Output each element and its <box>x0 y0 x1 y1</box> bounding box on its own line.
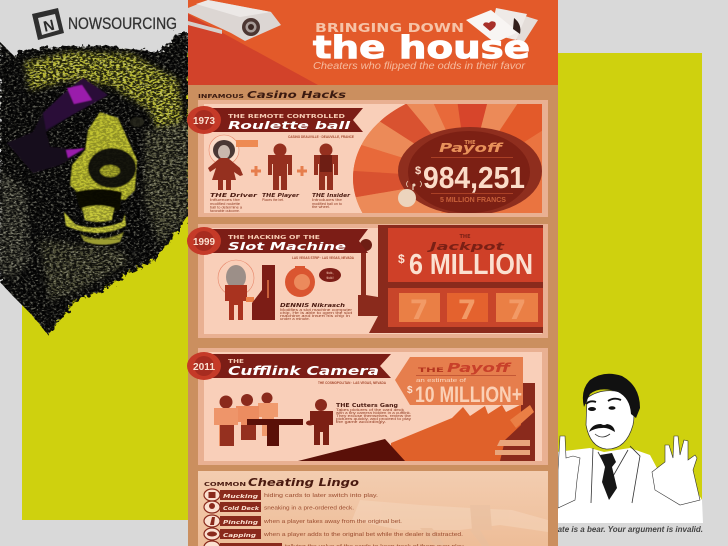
meme face <box>586 391 634 449</box>
label: driver: ball to determine a <box>210 206 242 210</box>
panel: slot machine <box>187 224 548 338</box>
bubble: tick tick <box>319 268 341 282</box>
label: dennis nikrasch: machine and insert his chip in <box>280 314 350 318</box>
panel: cufflink camera <box>187 348 548 465</box>
bear fur hatching <box>0 30 188 340</box>
icon: roulette ball <box>398 181 422 207</box>
reel: seven one <box>399 293 440 326</box>
label: cutters gang <box>336 403 411 424</box>
title: Cheaters who flipped the odds in their favor <box>313 60 526 72</box>
reel: seven two <box>447 293 488 326</box>
jackpot text: 6 MILLION <box>409 249 533 281</box>
label: dennis nikrasch: Modifies a slot machine computer <box>280 308 353 312</box>
heading: infamous casino hacks: INFAMOUS <box>198 94 244 100</box>
figure: dennis nikrasch <box>218 260 254 320</box>
callout: payoff: THE <box>418 366 444 374</box>
ribbon: 1973 <box>187 106 363 134</box>
term: mucking: Mucking <box>223 494 258 500</box>
callout: payoff: an estimate of <box>416 378 467 384</box>
title: BRINGING DOWN <box>315 21 464 35</box>
logo: NOWSOURCING: N <box>42 17 56 36</box>
slot machine body <box>358 225 543 333</box>
meme: skeptical man <box>556 374 703 523</box>
payoff figures: THE <box>464 140 476 146</box>
title: the house <box>313 30 530 66</box>
panel: cheating lingo <box>198 471 548 546</box>
label: insider <box>312 193 350 209</box>
term: cold deck: Cold Deck <box>223 506 259 512</box>
label: player: Places the bet. <box>262 198 284 202</box>
icon: slot silhouette <box>252 265 275 320</box>
ribbon: 2011: Cufflink Camera <box>228 364 379 378</box>
label: dennis nikrasch: under a minute. <box>280 317 310 321</box>
figure: dealer <box>306 399 333 445</box>
ribbon: 1973: 1973 <box>193 116 215 127</box>
heading: infamous casino hacks <box>198 90 346 101</box>
meme left hand <box>558 436 580 508</box>
icon: chip device <box>285 266 315 297</box>
callout: payoff: $ <box>407 385 413 396</box>
callout: payoff: 10 MILLION+ <box>415 382 522 407</box>
term: pinching: Pinching <box>223 520 258 526</box>
label: driver: modified roulette <box>210 202 240 206</box>
icon: security camera <box>188 0 281 41</box>
term: card counting <box>204 541 465 546</box>
location: LAS VEGAS STRIP · LAS VEGAS, NEVADA <box>292 256 355 260</box>
label: dennis nikrasch: chip. He is able to open the slot <box>280 311 352 315</box>
figure: insider <box>314 144 338 190</box>
reel: seven two: 7 <box>458 295 476 326</box>
reel: seven three: 7 <box>508 295 526 326</box>
figure: player <box>268 144 292 190</box>
term: cold deck <box>204 501 354 513</box>
label: dennis nikrasch <box>280 303 353 321</box>
label: insider: the wheel. <box>312 205 330 209</box>
ribbon: 1999 <box>187 227 368 255</box>
ribbon: 1999: THE HACKING OF THE <box>228 235 320 241</box>
jackpot text: $ <box>398 252 405 266</box>
title <box>313 21 530 72</box>
bear muzzle <box>64 112 144 245</box>
icon: playing cards <box>466 8 538 43</box>
label: cutters gang: THE Cutters Gang <box>336 403 398 409</box>
heading: cheating lingo <box>204 477 359 489</box>
heading: infamous casino hacks: Casino Hacks <box>247 90 346 101</box>
yellow background block <box>22 53 702 520</box>
label: driver: favorable outcome. <box>210 209 240 213</box>
label: driver: THE Driver <box>210 193 257 199</box>
jackpot text: Jackpot <box>427 240 505 253</box>
faded hand illustration <box>352 500 548 546</box>
figure: driver <box>208 135 258 190</box>
logo: NOWSOURCING <box>32 8 177 40</box>
payoff figures: 984,251 <box>423 160 525 195</box>
jackpot text <box>398 234 533 281</box>
label: cutters gang: pictures quickly, and proceed to play <box>336 417 411 421</box>
caption: your argument is invalid: ate is a bear. Your argument is invalid. <box>558 525 703 534</box>
bear lightning paint <box>7 78 108 173</box>
label: cutters gang: the game accordingly. <box>336 420 386 424</box>
label: insider: modified ball on to <box>312 202 342 206</box>
ribbon: 1973: Roulette ball <box>228 119 350 132</box>
panel: roulette ball <box>187 100 548 217</box>
term: mucking: hiding cards to later switch into play. <box>264 493 378 499</box>
jackpot text: THE <box>459 234 471 240</box>
label: cutters gang: They excuse themselves, review the <box>336 414 411 418</box>
label: player <box>262 193 299 202</box>
callout: payoff: Payoff <box>447 361 512 375</box>
icon: table <box>247 419 303 446</box>
meme eyes and brows <box>586 399 621 437</box>
logo: NOWSOURCING: NOWSOURCING <box>68 15 177 33</box>
reel: seven three <box>496 293 538 326</box>
infographic column <box>187 0 590 546</box>
bear lit fur <box>0 52 188 300</box>
bear muzzle hatching <box>66 110 140 240</box>
label: insider: Introduces the <box>312 198 342 202</box>
label: dennis nikrasch: DENNIS Nikrasch <box>280 303 345 309</box>
reel: seven one: 7 <box>410 295 428 326</box>
illustration: hand and cards <box>298 383 535 461</box>
term: cold deck: sneaking in a pre-ordered deck. <box>264 506 354 512</box>
label: cutters gang: Takes pictures of the card deck <box>336 408 404 412</box>
label: driver <box>210 193 257 213</box>
callout: payoff <box>395 357 523 407</box>
term: capping <box>204 528 463 540</box>
term: capping: when a player adds to the original bet while the dealer is distracted. <box>264 532 463 538</box>
icon: plus <box>251 166 261 176</box>
heading: cheating lingo: COMMON <box>204 482 247 488</box>
icon: plus <box>297 166 307 176</box>
ribbon: 1973: THE REMOTE CONTROLLED <box>228 114 346 120</box>
location: CASINO DEAUVILLE · DEAUVILLE, FRANCE <box>288 135 354 139</box>
payoff figures: $ <box>415 165 421 177</box>
ribbon: 2011: THE <box>228 359 244 365</box>
roulette wheel <box>353 104 542 213</box>
term: pinching: when a player takes away from the original bet. <box>264 519 402 525</box>
meme moustache <box>589 424 615 432</box>
bubble: tick tick: tick! <box>326 275 334 280</box>
term: mucking <box>204 489 378 501</box>
term: capping: Capping <box>223 533 256 539</box>
meme tie <box>600 453 617 500</box>
meme right hand <box>652 436 700 505</box>
figure: cutters gang <box>214 392 278 446</box>
ribbon: 1999: 1999 <box>193 237 215 248</box>
term: pinching <box>204 515 402 527</box>
payoff figures <box>415 140 525 204</box>
payoff figures: 5 MILLION FRANCS <box>440 195 506 204</box>
bubble: tick tick: tick, <box>326 270 334 275</box>
heading: cheating lingo: Cheating Lingo <box>248 477 359 489</box>
label: insider: THE Insider <box>312 193 350 199</box>
label: driver: Influences the <box>210 198 240 202</box>
ribbon: 2011: 2011 <box>193 362 215 373</box>
payoff figures: Payoff <box>439 141 504 155</box>
meme hair <box>583 374 640 418</box>
ribbon: 2011 <box>187 352 391 380</box>
header banner <box>188 0 558 85</box>
label: cutters gang: with a tiny camera hidden in a cufflink. <box>336 411 411 415</box>
illustration: bear head <box>0 30 188 340</box>
ribbon: 1999: Slot Machine <box>228 240 347 253</box>
location: THE COSMOPOLITAN · LAS VEGAS, NEVADA <box>318 381 387 385</box>
label: player: THE Player <box>262 193 299 199</box>
meme body <box>556 448 703 523</box>
